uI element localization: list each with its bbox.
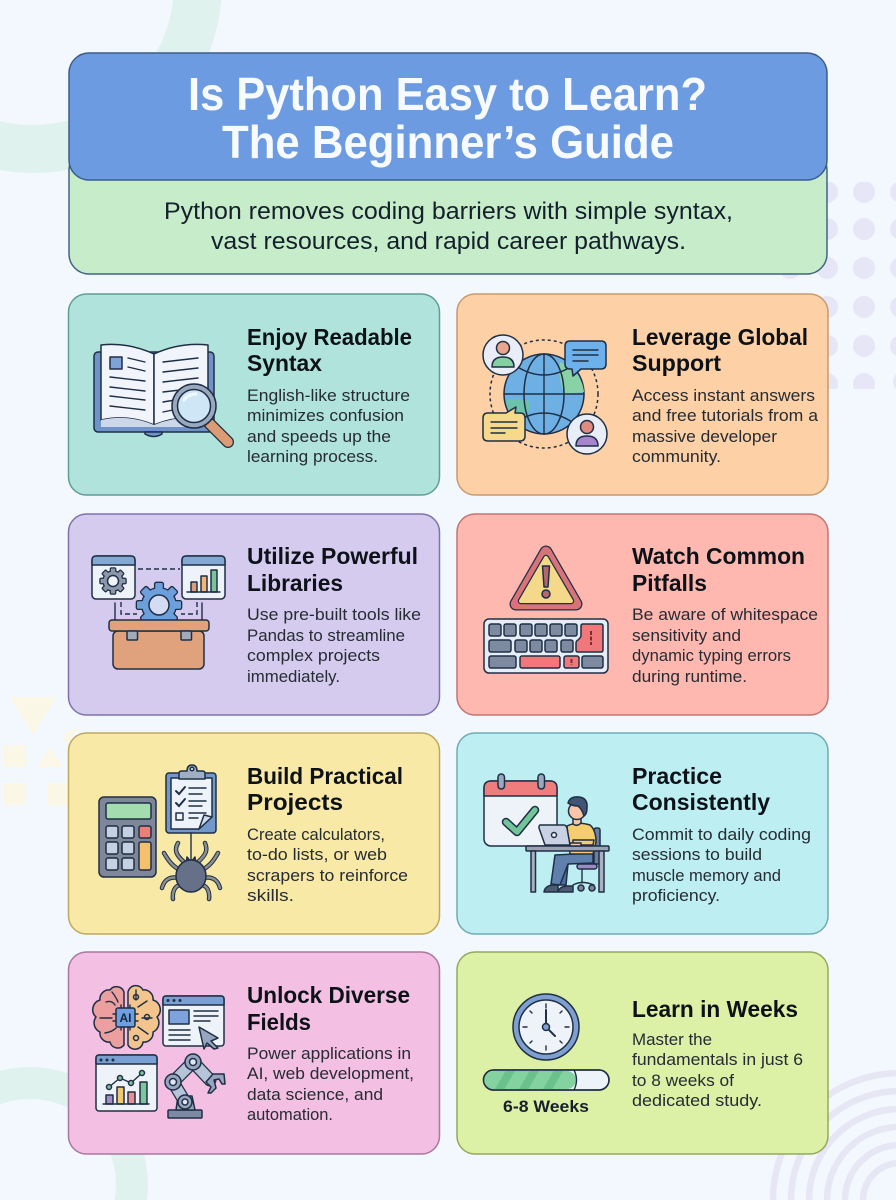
body text: Use pre-built tools like bbox=[247, 605, 421, 624]
body text: immediately. bbox=[247, 667, 340, 686]
icon: calendar and person at desk bbox=[484, 774, 609, 892]
icon: open book with magnifier bbox=[94, 344, 228, 442]
panel: Practice Consistently bbox=[457, 733, 828, 934]
heading: Consistently bbox=[632, 789, 770, 815]
heading: Pitfalls bbox=[632, 570, 707, 596]
body text: automation. bbox=[247, 1105, 333, 1124]
icon: warning sign and keyboard bbox=[484, 552, 608, 673]
heading: Learn in Weeks bbox=[632, 996, 798, 1022]
panel: Enjoy Readable Syntax bbox=[68, 294, 440, 495]
body text: sensitivity and bbox=[632, 626, 741, 645]
title text: Is Python Easy to Learn? bbox=[188, 68, 707, 120]
heading: Syntax bbox=[247, 350, 322, 376]
heading: Watch Common bbox=[632, 543, 805, 569]
panel: subtitle bbox=[69, 150, 827, 274]
heading: Utilize Powerful bbox=[247, 543, 418, 569]
heading: Build Practical bbox=[247, 763, 403, 789]
body text: data science, and bbox=[247, 1085, 383, 1104]
decoration: top-left ring bbox=[0, 0, 221, 173]
heading: Enjoy Readable bbox=[247, 324, 412, 350]
body text: Be aware of whitespace bbox=[632, 605, 818, 624]
body text: and free tutorials from a bbox=[632, 406, 819, 425]
panel: Build Practical Projects bbox=[68, 733, 440, 934]
panel: Watch Common Pitfalls bbox=[457, 514, 828, 715]
body text: Master the bbox=[632, 1030, 712, 1049]
body text: minimizes confusion bbox=[247, 406, 404, 425]
body text: muscle memory and bbox=[632, 866, 781, 885]
progress label: 6-8 Weeks bbox=[503, 1097, 589, 1116]
body text: fundamentals in just 6 bbox=[632, 1050, 803, 1069]
icon: calculator, checklist and spider bbox=[99, 765, 220, 899]
body text: learning process. bbox=[247, 447, 378, 466]
decoration: geometric shapes bbox=[3, 697, 78, 805]
heading: Fields bbox=[247, 1009, 311, 1035]
body text: dynamic typing errors bbox=[632, 646, 791, 665]
body text: scrapers to reinforce bbox=[247, 866, 408, 885]
body text: and speeds up the bbox=[247, 427, 391, 446]
body text: English-like structure bbox=[247, 386, 410, 405]
heading: Practice bbox=[632, 763, 722, 789]
icon: clock and progress bar bbox=[484, 994, 609, 1116]
title text: The Beginner’s Guide bbox=[222, 116, 674, 168]
panel: Unlock Diverse Fields bbox=[68, 952, 440, 1154]
subtitle text: vast resources, and rapid career pathways. bbox=[211, 228, 686, 255]
heading: Support bbox=[632, 350, 721, 376]
icon: toolbox with gears and charts bbox=[92, 556, 225, 669]
body text: AI, web development, bbox=[247, 1064, 414, 1083]
body text: to 8 weeks of bbox=[632, 1071, 734, 1090]
decoration: bottom-left ring bbox=[0, 1067, 148, 1200]
body text: complex projects bbox=[247, 646, 380, 665]
body text: dedicated study. bbox=[632, 1091, 762, 1110]
body text: community. bbox=[632, 447, 721, 466]
heading: Leverage Global bbox=[632, 324, 808, 350]
body text: Create calculators, bbox=[247, 825, 385, 844]
body text: Pandas to streamline bbox=[247, 626, 405, 645]
decoration: concentric arcs bbox=[773, 1073, 896, 1200]
body text: to-do lists, or web bbox=[247, 845, 387, 864]
panel: title bbox=[69, 53, 827, 180]
icon: AI brain, web page, chart and robot arm bbox=[93, 986, 225, 1118]
body text: Access instant answers bbox=[632, 386, 815, 405]
heading: Projects bbox=[247, 789, 343, 815]
body text: skills. bbox=[247, 886, 294, 905]
body text: massive developer bbox=[632, 427, 777, 446]
body text: Power applications in bbox=[247, 1044, 411, 1063]
body text: sessions to build bbox=[632, 845, 762, 864]
body text: proficiency. bbox=[632, 886, 720, 905]
subtitle text: Python removes coding barriers with simple syntax, bbox=[164, 198, 733, 225]
heading: Unlock Diverse bbox=[247, 982, 410, 1008]
panel: Leverage Global Support bbox=[457, 294, 828, 495]
panel: Utilize Powerful Libraries bbox=[68, 514, 440, 715]
icon: globe with people and chat bbox=[483, 335, 607, 454]
body text: during runtime. bbox=[632, 667, 747, 686]
body text: Commit to daily coding bbox=[632, 825, 811, 844]
heading: Libraries bbox=[247, 570, 343, 596]
decoration: dot grid bbox=[779, 181, 896, 395]
panel: Learn in Weeks bbox=[457, 952, 828, 1154]
icon: AI brain, web page, chart and robot arm: AI bbox=[120, 1011, 132, 1025]
